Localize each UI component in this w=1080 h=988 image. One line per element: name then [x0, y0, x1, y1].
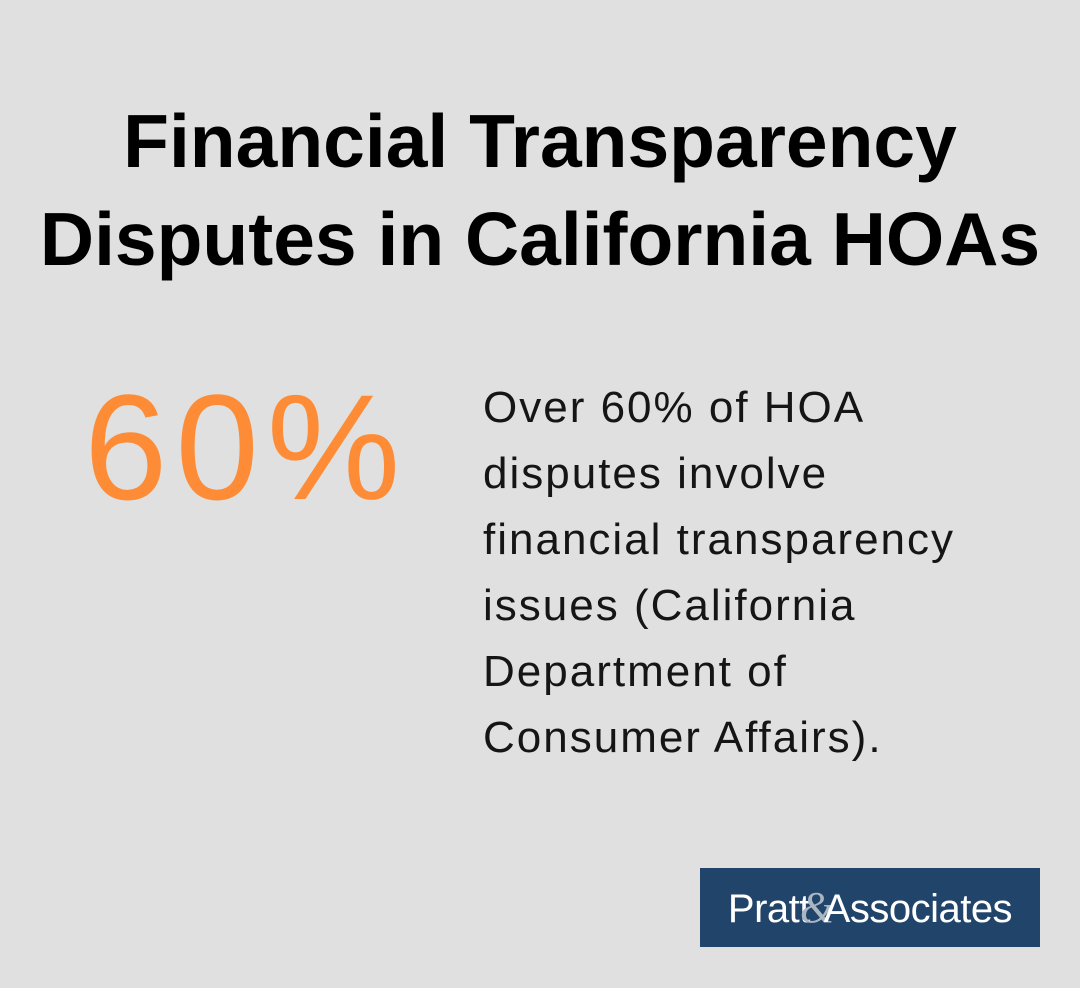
- description text: Consumer Affairs).: [483, 713, 883, 762]
- description text: [483, 383, 955, 762]
- description text: Over 60% of HOA: [483, 383, 865, 432]
- description text: financial transparency: [483, 515, 955, 564]
- logo: Pratt & Associates: Pratt&Associates: [728, 883, 1012, 932]
- big stat: 60%: 60%: [84, 363, 408, 531]
- title: Disputes in California HOAs: [40, 197, 1040, 281]
- description text: Department of: [483, 647, 788, 696]
- title: Financial Transparency: [123, 99, 957, 183]
- title: [40, 99, 1040, 281]
- description text: disputes involve: [483, 449, 828, 498]
- description text: issues (California: [483, 581, 856, 630]
- logo: Pratt & Associates: [700, 868, 1040, 947]
